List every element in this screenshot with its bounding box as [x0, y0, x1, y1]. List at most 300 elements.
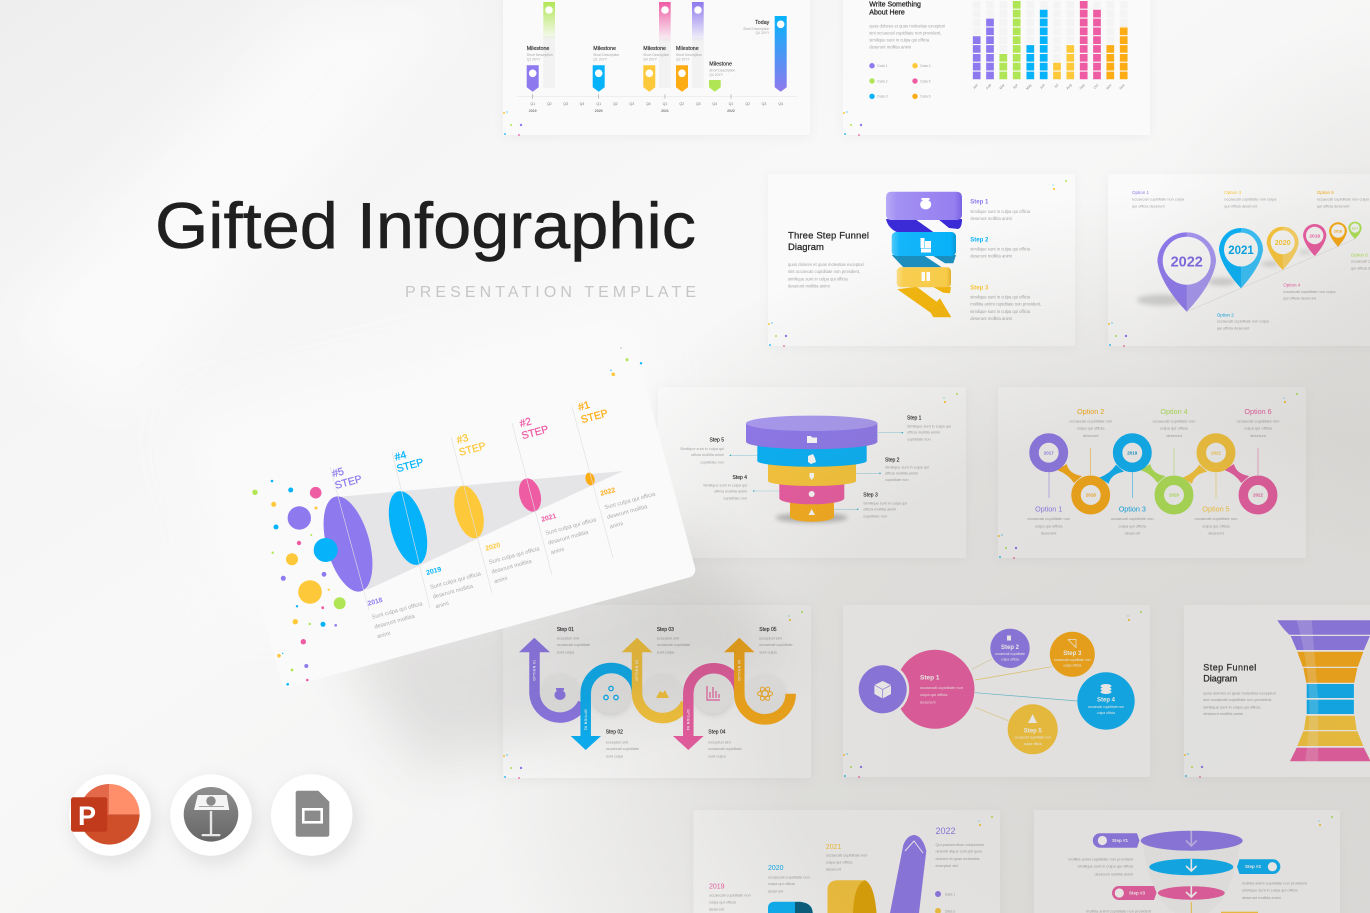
step descriptions: deserunt mollitia [548, 530, 590, 547]
step 3 bubble: culpa officia [1063, 664, 1081, 668]
milestone labels: Milestone [643, 46, 666, 52]
year labels: deserunt [709, 907, 725, 912]
month labels: Jun [1039, 83, 1046, 90]
funnel step labels: officia mollitia animi [907, 431, 940, 435]
step 4 bubble: Step 4 [1097, 698, 1116, 704]
chart legend: Data 6 [920, 95, 931, 99]
option labels: Option 5 [1317, 190, 1334, 195]
step headings: #2 [518, 415, 533, 430]
step 1 bubble [896, 650, 974, 729]
step descriptions: deserunt mollitia [607, 504, 649, 521]
milestone labels: Milestone [676, 46, 699, 52]
step headings: #3 [455, 432, 470, 447]
step 5 bubble [1008, 704, 1058, 754]
funnel description: sint occaecati cupiditate non provident, [788, 269, 860, 274]
funnel step labels: Step 4 [733, 475, 747, 481]
step descriptions: animi [550, 547, 565, 556]
timeline axis labels: Q3 [696, 102, 701, 106]
ring option labels: Option 4 [1160, 407, 1188, 416]
step 1 bubble: Step 1 [920, 674, 940, 681]
ring option labels: occaecati cupiditate non [1111, 516, 1154, 521]
ribbon icons [920, 198, 931, 281]
step descriptions: Sunt culpa qui officia [371, 601, 424, 621]
subtitle: PRESENTATION TEMPLATE [405, 284, 696, 301]
step labels: deserunt mollitia animi [970, 216, 1012, 221]
step descriptions: Sunt culpa qui officia [545, 517, 598, 537]
funnel heading: Diagram [788, 242, 824, 253]
step 1 bubble: occaecati cupiditate non [920, 685, 963, 690]
step labels: similique sunt in culpa qui officia [970, 246, 1031, 251]
timeline axis labels: Q3 [629, 102, 634, 106]
option labels: qui officia deserunt [1217, 325, 1250, 330]
hourglass heading: Diagram [1203, 674, 1237, 684]
arrow option labels: OPTION 04 [686, 709, 690, 731]
funnel icons [807, 436, 817, 515]
step tags: Step #1 [1112, 838, 1129, 843]
ring option labels: deserunt [1041, 531, 1057, 536]
option labels: Option 3 [1224, 190, 1242, 195]
step labels: similique sunt in culpa qui officia [970, 209, 1031, 214]
chart legend: Data 3 [877, 95, 888, 99]
milestone labels: Q4 20YY [643, 58, 658, 62]
arrow step labels: sunt culpa [708, 754, 726, 758]
step headings: STEP [458, 440, 487, 459]
timeline axis labels: Q3 [563, 102, 568, 106]
chart legend: Data 5 [920, 79, 931, 83]
year labels: culpa qui officia [826, 859, 853, 864]
chart heading: Write Something [869, 2, 921, 9]
timeline axis labels: 2022 [727, 109, 735, 113]
step headings [331, 399, 609, 492]
timeline axis labels: 2021 [661, 109, 669, 113]
ellipse funnel descriptions: deserunt mollitia animi [1242, 895, 1281, 900]
year labels [709, 826, 984, 912]
ring option labels [1027, 407, 1279, 536]
ring option labels: culpa qui officia [1119, 523, 1147, 528]
timeline axis labels: 2019 [529, 109, 537, 113]
panel: stacked square bar chart [843, 0, 1150, 136]
ring connectors [1057, 464, 1249, 484]
timeline axis labels: Q2 [679, 102, 684, 106]
ring option labels: Option 2 [1077, 407, 1104, 416]
funnel step labels: cupiditate non [907, 437, 931, 441]
timeline axis labels: Q2 [745, 102, 750, 106]
month labels: Sep [1079, 83, 1086, 90]
pin 2019 [1303, 224, 1326, 256]
arrow step labels: sunt culpa [759, 650, 777, 654]
ring option labels: occaecati cupiditate non [1153, 418, 1195, 423]
ring option labels: deserunt [1166, 433, 1183, 438]
month labels: Oct [1093, 83, 1099, 90]
milestone labels: Today [755, 20, 770, 26]
year labels: culpa qui officia [709, 899, 737, 904]
month labels: Aug [1065, 83, 1073, 90]
chart description: deserunt mollitia animi [869, 44, 911, 49]
step 4 bubble: occaecati cupiditate non [1088, 705, 1124, 709]
year labels: 2022 [936, 826, 956, 836]
milestone labels: Short Description [643, 53, 669, 57]
icon: PowerPoint [69, 774, 151, 856]
milestone labels: Short Description [709, 68, 735, 72]
pin 2022: 2022 [1171, 254, 1203, 270]
milestone banners [527, 2, 787, 92]
ellipse funnel descriptions: similique sunt in culpa qui officia [1242, 887, 1298, 892]
year labels: 2020 [768, 865, 784, 872]
arrow step labels: excepturi sint [606, 740, 629, 744]
year labels: occaecati cupiditate non [768, 874, 810, 879]
arrow option labels: OPTION 03 [635, 659, 639, 681]
arrow step labels: Step 05 [759, 627, 777, 633]
funnel description: similique sunt in culpa qui officia [788, 276, 848, 281]
ring option labels: Option 6 [1244, 407, 1272, 416]
funnel step labels: Similique sunt in culpa qui [863, 502, 907, 506]
step 2 bubble: occaecati cupiditate [995, 652, 1025, 656]
step 4 bubble: culpa officia [1097, 711, 1115, 715]
ring option labels: culpa qui officia [1244, 426, 1273, 431]
step 3 bubble [1050, 632, 1095, 677]
chart legend [869, 63, 931, 99]
funnel step labels: Similique sunt in culpa qui [907, 425, 951, 429]
year labels: deleniti atque corrupti quos [936, 848, 982, 854]
year labels: 2019 [709, 883, 725, 890]
step tags [1093, 833, 1280, 913]
step labels: similique sunt in culpa qui officia [970, 309, 1031, 314]
arrow option labels [532, 659, 742, 731]
step years: 2022 [600, 487, 616, 498]
step headings: STEP [334, 473, 363, 492]
funnel step labels: cupiditate non [863, 514, 887, 518]
timeline axis labels: Q3 [762, 102, 766, 106]
timeline axis labels: Q4 [712, 102, 717, 106]
milestone labels: Q1 20YY [527, 58, 541, 62]
cylinder funnel [746, 416, 877, 522]
ring option labels: deserunt [1083, 433, 1099, 438]
ellipse funnel descriptions: similique sunt in culpa qui officia [1078, 863, 1134, 868]
step descriptions: Sunt culpa qui officia [430, 571, 483, 591]
step years: 2018 [367, 597, 384, 608]
step tags: Step #3 [1129, 890, 1146, 896]
ring option labels: occaecati cupiditate non [1027, 516, 1070, 521]
arrow step labels: Step 01 [557, 627, 574, 633]
step labels: Step 3 [970, 285, 989, 291]
ring year labels: 2020 [1169, 493, 1180, 498]
chart legend: Data 2 [877, 79, 888, 83]
pin shadows [1137, 250, 1311, 306]
hourglass description: quos dolores et quas molestias excepturi [1203, 690, 1276, 695]
step labels: mollitia animi cupiditate non provident, [970, 302, 1041, 307]
ring option labels: deserunt [1208, 531, 1225, 536]
panel: year growth bars [694, 810, 1000, 913]
ring option labels: culpa qui officia [1077, 426, 1105, 431]
panel: winding arrows [503, 605, 811, 779]
arrow circles [540, 674, 784, 713]
month labels: Jan [972, 83, 979, 90]
step divider lines [330, 407, 613, 610]
pin 2017: 2017 [1352, 226, 1359, 230]
arrow step labels: excepturi sint [657, 636, 680, 640]
step headings: STEP [580, 407, 609, 426]
funnel step labels: Step 3 [863, 492, 878, 498]
pin 2020 [1267, 227, 1299, 270]
step headings: #5 [331, 465, 346, 480]
ring option labels: Option 1 [1035, 505, 1062, 514]
arrow step labels: Step 04 [708, 730, 726, 736]
ribbon funnel [886, 192, 962, 317]
timeline axis labels: Q1 [530, 102, 535, 106]
step 3 bubble: occaecati cupiditate non [1054, 658, 1091, 662]
step labels [970, 200, 1041, 321]
step headings: #1 [577, 399, 592, 414]
arrow icons [554, 686, 772, 702]
timeline axis labels: Q4 [580, 102, 584, 106]
chart description: similique sunt in culpa qui officia [869, 37, 930, 42]
connector lines [972, 659, 1077, 721]
ellipse funnel discs [1141, 826, 1243, 913]
year labels: excepturi sint [936, 863, 959, 868]
funnel step labels: Similique sunt in culpa qui [703, 484, 747, 488]
step years: 2021 [541, 513, 557, 524]
step descriptions: animi [494, 576, 508, 585]
chart legend: Data 4 [920, 64, 931, 68]
funnel step labels: Step 2 [885, 457, 900, 463]
ring option labels: occaecati cupiditate non [1195, 516, 1237, 521]
arrow step labels: occaecati cupiditate [557, 643, 590, 647]
arrow step labels: excepturi sint [557, 636, 580, 640]
funnel description: quos dolores et quas molestias excepturi [788, 262, 864, 267]
option labels: qui officia deserunt [1224, 203, 1258, 208]
chart description: sint occaecati cupiditate non provident, [869, 30, 941, 35]
ellipse funnel descriptions: mollitia animi cupiditate non provident [1068, 856, 1134, 861]
step descriptions: deserunt mollitia [491, 559, 533, 576]
step 2 bubble: Step 2 [1001, 645, 1020, 651]
funnel step labels: Step 5 [710, 438, 724, 444]
milestone labels: Short Description [743, 27, 769, 31]
ring option labels: occaecati cupiditate non [1237, 418, 1279, 423]
pin 2019: 2019 [1309, 233, 1320, 239]
step headings: STEP [520, 423, 550, 442]
step tags: Step #2 [1245, 864, 1262, 869]
panel: bubble step diagram [843, 605, 1150, 778]
step 1 bubble: culpa qui officia [920, 692, 948, 697]
arrow step labels: occaecati cupiditate [606, 747, 639, 751]
pin 2018 [1329, 222, 1347, 247]
funnel step labels: cupiditate non [885, 478, 909, 482]
arrow option labels: OPTION 01 [532, 659, 536, 681]
step descriptions: animi [609, 521, 624, 531]
milestone labels [527, 20, 770, 77]
year labels: deserunt [768, 888, 784, 893]
ring year labels: 2021 [1211, 450, 1222, 456]
arrow step labels: excepturi sint [759, 636, 783, 640]
ring option labels: culpa qui officia [1202, 523, 1231, 528]
cone backdrop [337, 471, 623, 590]
step headings: #4 [393, 449, 408, 464]
timeline axis labels: Q4 [778, 102, 783, 106]
step years [367, 487, 616, 608]
step years: 2020 [485, 542, 501, 553]
year labels: 2021 [826, 844, 841, 851]
winding ribbon arrows [519, 638, 791, 750]
arrow step labels: excepturi sint [708, 740, 732, 744]
ellipse funnel descriptions: mollitia animi cupiditate non provident [1242, 881, 1308, 886]
option labels: occaecati cupiditate non culpa [1132, 197, 1185, 202]
arrow option labels: OPTION 05 [738, 659, 742, 681]
option labels: Option 2 [1217, 312, 1234, 317]
step labels: deserunt mollitia animi [970, 316, 1012, 321]
arrow step labels: occaecati cupiditate [657, 643, 690, 647]
arrow step labels: Step 03 [657, 627, 674, 633]
option labels [1132, 190, 1370, 330]
step 2 bubble: culpa officia [1001, 658, 1019, 662]
step years: 2019 [426, 566, 442, 577]
funnel step labels: cupiditate non [723, 496, 747, 500]
ring year labels: 2019 [1127, 450, 1138, 456]
month labels: May [1025, 83, 1033, 91]
chart description: quos dolores et quas molestias excepturi [869, 23, 945, 28]
funnel step labels: officia mollitia animi [691, 453, 724, 457]
year labels: deserunt [826, 867, 842, 872]
chart heading: About Here [869, 9, 905, 16]
panel: milestone timeline [503, 0, 810, 136]
month labels: Jul [1053, 83, 1059, 89]
pin 2020: 2020 [1275, 238, 1291, 247]
arrow option labels: OPTION 02 [584, 709, 588, 731]
milestone labels: Milestone [527, 46, 549, 52]
panel: ellipse funnel [1034, 810, 1340, 913]
panel: map pin timeline [1108, 174, 1370, 347]
option labels: qui officia deserunt [1317, 203, 1350, 208]
pin 2021: 2021 [1228, 245, 1254, 257]
year labels: Qui praesentium voluptatum [936, 842, 984, 847]
panel: featured 5 step cone card [220, 344, 697, 688]
year legend [935, 891, 955, 913]
step 4 bubble [1077, 672, 1135, 730]
timeline axis labels: Q1 [596, 102, 601, 106]
hourglass description: similique sunt in culpa qui officia [1203, 705, 1261, 710]
month labels: Mar [999, 82, 1006, 90]
step 2 bubble [990, 629, 1030, 668]
timeline axis labels [529, 94, 783, 113]
year legend: Data 1 [945, 892, 955, 896]
ring option labels: Option 5 [1202, 505, 1230, 514]
funnel step labels: officia mollitia animi [863, 508, 896, 512]
year rings [1034, 438, 1273, 510]
month labels: Apr [1012, 82, 1019, 90]
ring option labels: deserunt [1125, 531, 1141, 536]
step labels: similique sunt in culpa qui officia [970, 295, 1031, 300]
option labels: Option 4 [1283, 283, 1301, 288]
timeline axis labels: Q1 [729, 102, 733, 106]
timeline ghost tracks [543, 36, 704, 88]
funnel step labels: Similique sunt in culpa qui [680, 447, 724, 451]
milestone labels: Milestone [593, 46, 616, 52]
ellipse funnel descriptions [1068, 856, 1308, 913]
step labels: Step 2 [970, 237, 989, 243]
step descriptions [371, 491, 662, 640]
confetti dots [252, 347, 642, 686]
bars [977, 0, 1124, 79]
step descriptions: Sunt culpa qui officia [488, 546, 541, 566]
ring year labels: 2022 [1253, 493, 1264, 498]
milestone labels: Q4 20YY [756, 31, 770, 35]
arrow step labels [557, 627, 793, 758]
step headings: STEP [395, 456, 425, 475]
timeline axis labels: Q2 [613, 102, 618, 106]
cone ellipses [314, 472, 596, 597]
funnel step labels: cupiditate non [700, 460, 724, 464]
funnel connectors [730, 432, 903, 510]
funnel step labels: officia mollitia animi [714, 490, 747, 494]
step 3 bubble: Step 3 [1063, 651, 1082, 657]
arrow step labels: sunt culpa [657, 650, 675, 654]
step 5 bubble: culpa officia [1024, 742, 1042, 746]
pin 2017 [1348, 222, 1362, 239]
month labels: Dec [1119, 83, 1126, 90]
month labels: Nov [1105, 83, 1113, 90]
step descriptions: animi [377, 631, 391, 640]
step labels: Step 1 [970, 200, 989, 206]
milestone labels: Short Description [676, 53, 702, 57]
year growth bars [768, 835, 926, 913]
step descriptions: deserunt mollitia [432, 584, 475, 601]
option labels: occaecati cupiditate non culpa [1224, 197, 1277, 202]
funnel heading: Three Step Funnel [788, 231, 869, 242]
option labels: occaecati cupiditate non culpa [1283, 289, 1336, 294]
option labels: occaecati cupiditate non culpa [1217, 319, 1270, 324]
funnel description: deserunt mollitia animi [788, 283, 830, 288]
timeline axis labels: 2020 [595, 109, 603, 113]
pin 2018: 2018 [1334, 230, 1342, 234]
option labels: qui officia deserunt [1283, 296, 1317, 301]
ring year labels [1044, 450, 1264, 498]
ring year labels: 2017 [1044, 450, 1054, 456]
option labels: Option 1 [1132, 190, 1150, 195]
hourglass description: deserunt mollitia animi [1203, 711, 1243, 716]
ring stems [1049, 448, 1258, 498]
ring option labels: deserunt [1250, 433, 1267, 438]
panel: stacked cylinder funnel [658, 387, 966, 559]
milestone labels: Q1 20YY [593, 58, 608, 62]
timeline axis labels: Q1 [663, 102, 667, 106]
milestone labels: Milestone [709, 62, 732, 68]
year labels: occaecati cupiditate non [826, 853, 867, 858]
option labels: Option 6 [1351, 252, 1368, 257]
step labels: deserunt mollitia animi [970, 253, 1012, 258]
chart legend: Data 1 [877, 64, 888, 68]
title: Gifted Infographic [155, 189, 696, 262]
step descriptions: Sunt culpa qui officia [604, 491, 657, 511]
arrow step labels: Step 02 [606, 730, 623, 736]
panel: three step funnel [768, 174, 1075, 347]
step 5 bubble: Step 5 [1024, 728, 1042, 734]
ring option labels: occaecati cupiditate non [1069, 418, 1112, 423]
timeline axis labels: Q4 [646, 102, 651, 106]
panel: ring chain timeline [998, 387, 1306, 559]
hourglass bands [1277, 620, 1370, 761]
step descriptions: animi [435, 601, 450, 610]
year labels: occaecati cupiditate non [709, 892, 751, 897]
panel: hourglass step funnel [1184, 605, 1370, 778]
ring option labels: culpa qui officia [1035, 523, 1063, 528]
icon: Keynote [170, 774, 252, 856]
arrow step labels: sunt culpa [606, 754, 624, 758]
option labels: occaecati cupiditate non culpa [1317, 197, 1370, 202]
funnel step labels: Similique sunt in culpa qui [885, 465, 929, 469]
arrow step labels: occaecati cupiditate [759, 643, 793, 647]
timeline axis labels: Q2 [547, 102, 552, 106]
month labels [972, 82, 1126, 91]
funnel step labels: Step 1 [907, 416, 922, 422]
